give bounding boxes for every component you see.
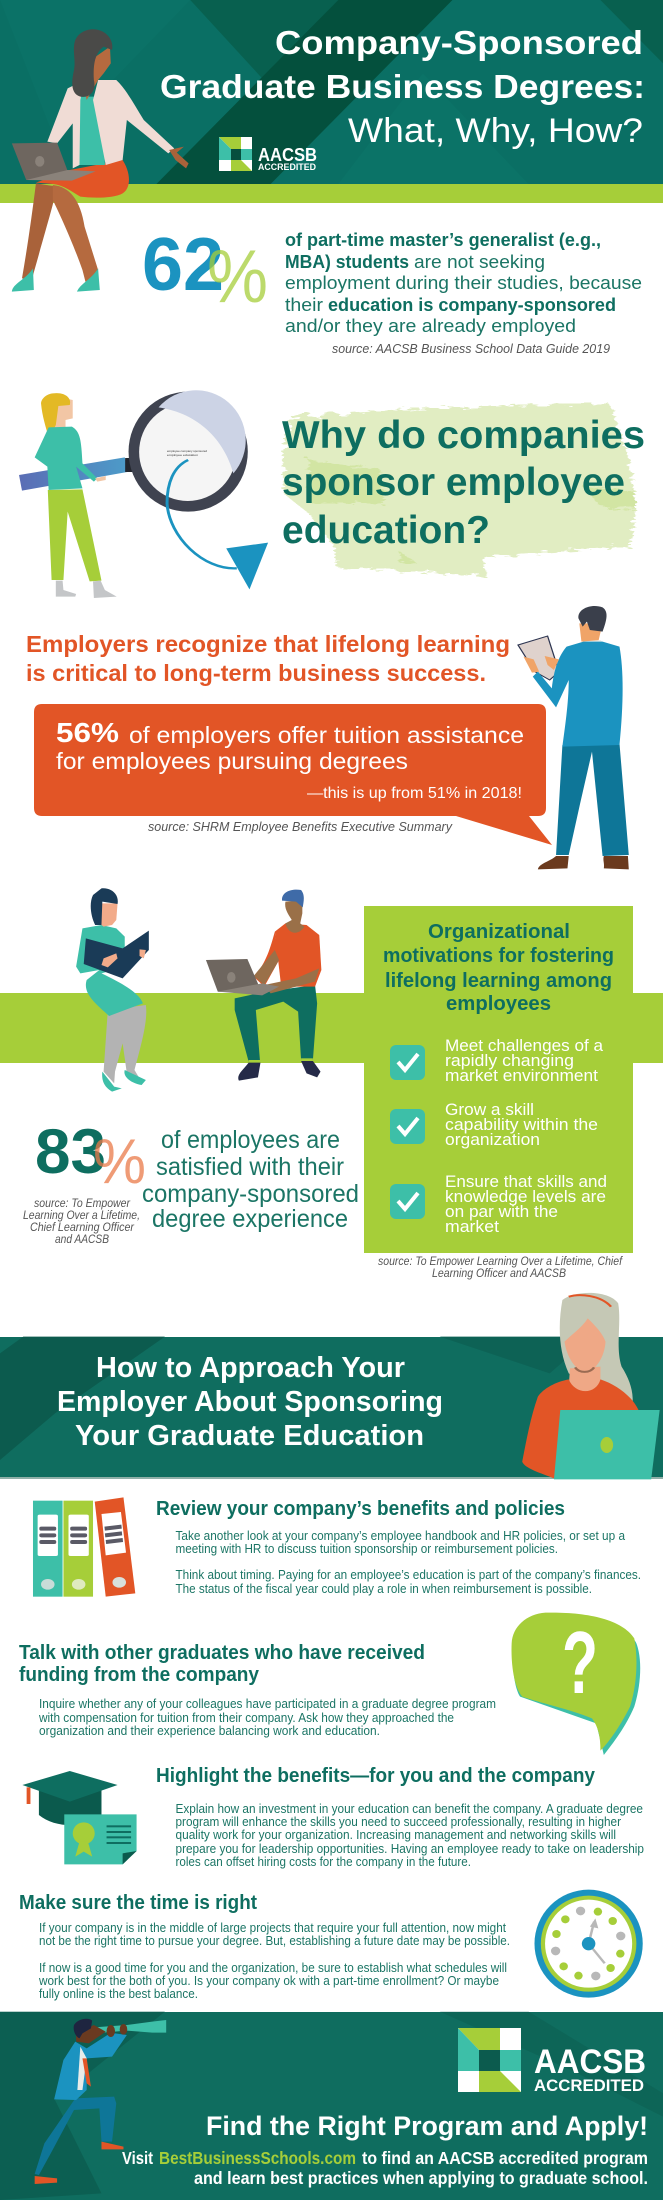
section: review your benefits: Take another look at your company’s employee handbook and HR policies, or set up a	[176, 1528, 626, 1543]
panel heading	[383, 920, 614, 1015]
source: data guide: source: AACSB Business School Data Guide 2019	[332, 342, 610, 356]
heading: why do companies: Why do companies	[282, 414, 645, 457]
list item 1: market environment	[445, 1067, 598, 1085]
section: highlight the benefits	[156, 1765, 644, 1869]
text: 62 percent description: their	[285, 294, 323, 315]
icon: question speech bubble: ?	[562, 1613, 598, 1712]
title: Company-Sponsored	[275, 24, 643, 61]
heading: employers recognize: is critical to long-term business success.	[26, 660, 486, 686]
illustration: man with telescope	[35, 2019, 166, 2184]
section: make sure the time is right: If now is a good time for you and the organization, be sure to establish what schedules will	[39, 1960, 507, 1975]
magnifier tiny text	[167, 449, 207, 457]
stat: 83 percent: 83	[35, 1117, 106, 1187]
magnifier tiny text: employee company sponsored	[167, 449, 207, 453]
illustration: woman with laptop	[12, 29, 189, 292]
icon: check 3	[390, 1184, 425, 1219]
icon: binders	[33, 1497, 135, 1597]
text: 62 percent description: are not seeking	[414, 251, 545, 272]
list item 1: rapidly changing	[445, 1052, 574, 1070]
text: call to action: BestBusinessSchools.com	[159, 2148, 356, 2168]
section: talk with other graduates: Talk with other graduates who have received	[19, 1642, 425, 1664]
section: make sure the time is right: If your company is in the middle of large projects that require your full attention, now might	[39, 1920, 506, 1935]
brush texture behind heading	[283, 403, 636, 577]
header banner	[0, 0, 663, 184]
list item 3	[445, 1173, 607, 1236]
text: 83 percent description	[142, 1126, 359, 1233]
panel: organizational motivations	[364, 906, 633, 1253]
section: talk with other graduates: funding from the company	[19, 1664, 260, 1686]
section: talk with other graduates: Inquire whether any of your colleagues have participated in a graduate degree program	[39, 1696, 496, 1711]
section: make sure the time is right: not be the right time to pursue your degree. But, establishing a future date may be possible.	[39, 1933, 510, 1948]
section: highlight the benefits: Highlight the benefits—for you and the company	[156, 1765, 596, 1787]
list item 2	[445, 1101, 598, 1149]
stat: 62 percent: %	[207, 234, 268, 318]
list item 3: on par with the	[445, 1203, 558, 1221]
text: 83 percent description: satisfied with their	[156, 1153, 344, 1181]
icon: graduation cap and certificate	[22, 1771, 137, 1864]
stat: 62 percent	[142, 222, 268, 318]
illustration: woman with teal laptop	[522, 1293, 660, 1479]
text: call to action: Visit	[122, 2148, 153, 2168]
text: 83 percent description: of employees are	[161, 1126, 340, 1154]
section: review your benefits: meeting with HR to discuss tuition sponsorship or reimbursement policies.	[176, 1541, 558, 1556]
text: 62 percent description: education is company-sponsored	[328, 294, 616, 315]
list item 3: market	[445, 1218, 499, 1236]
source: panel	[378, 1256, 624, 1280]
section: review your benefits	[156, 1498, 641, 1596]
logo: AACSB accredited: ACCREDITED	[258, 162, 316, 172]
title: What, Why, How?	[348, 112, 643, 150]
icon: check 2	[390, 1109, 425, 1144]
section: make sure the time is right: Make sure the time is right	[19, 1892, 257, 1914]
heading: employers recognize	[26, 631, 510, 686]
source: 83 percent: Learning Over a Lifetime,	[23, 1210, 140, 1222]
section: talk with other graduates: with compensation for tuition from their company. Ask how they approached the	[38, 1710, 454, 1725]
section: highlight the benefits: program will enhance the skills you need to succeed professionally, resulting in higher	[176, 1814, 622, 1829]
list item 1: Meet challenges of a	[445, 1037, 604, 1055]
section: review your benefits: The status of the fiscal year could play a role in when reimbursement is possible.	[176, 1581, 592, 1596]
list item 2: capability within the	[445, 1116, 598, 1134]
source: 83 percent: Chief Learning Officer	[30, 1222, 135, 1234]
list item 2: organization	[445, 1131, 540, 1149]
heading: how to approach: Your Graduate Education	[75, 1420, 424, 1452]
heading: how to approach: How to Approach Your	[96, 1352, 405, 1384]
illustration: man with laptop	[206, 890, 321, 1081]
section: make sure the time is right: fully online is the best balance.	[39, 1986, 198, 2001]
source: panel: source: To Empower Learning Over a Lifetime, Chief	[378, 1256, 624, 1268]
section: talk with other graduates: organization and their experience balancing work and education.	[39, 1723, 380, 1738]
panel heading: employees	[446, 992, 551, 1015]
illustration: woman with magnifying glass	[19, 390, 268, 598]
banner: how to approach	[0, 1337, 663, 1479]
list item 2: Grow a skill	[445, 1101, 534, 1119]
list item 3: knowledge levels are	[445, 1188, 606, 1206]
panel heading: motivations for fostering	[383, 944, 614, 967]
title	[160, 24, 645, 150]
source: 83 percent: source: To Empower	[34, 1198, 131, 1210]
text: 83 percent description: degree experience	[152, 1205, 348, 1233]
logo: AACSB accredited: AACSB	[258, 145, 317, 165]
text: call to action	[122, 2148, 648, 2188]
text: 62 percent description: employment during their studies, because	[285, 272, 642, 293]
heading: why do companies: education?	[282, 509, 490, 552]
illustration: man with clipboard	[518, 606, 629, 869]
callout: 56 percent of employers	[34, 704, 552, 845]
icon: question speech bubble	[512, 1613, 640, 1755]
stat: 83 percent: %	[93, 1127, 146, 1197]
source: SHRM: source: SHRM Employee Benefits Executive Summary	[148, 820, 453, 834]
callout: 56 percent of employers: of employers offer tuition assistance	[129, 722, 524, 748]
logo: AACSB accredited large: ACCREDITED	[534, 2076, 644, 2095]
stat: 62 percent: 62	[142, 222, 224, 306]
text: 62 percent description: of part-time master’s generalist (e.g.,	[285, 229, 601, 250]
stat: 83 percent	[35, 1117, 146, 1197]
icon: clock	[534, 1890, 643, 1998]
heading: employers recognize: Employers recognize that lifelong learning	[26, 631, 510, 657]
callout: 56 percent of employers: for employees pursuing degrees	[56, 748, 408, 774]
logo: AACSB accredited	[219, 137, 317, 172]
illustration: woman reading	[76, 888, 149, 1092]
section: make sure the time is right	[19, 1892, 510, 2001]
heading: why do companies	[282, 414, 645, 552]
source: panel: Learning Officer and AACSB	[432, 1268, 566, 1280]
section: highlight the benefits: roles can offset hiring costs for the company in the future.	[176, 1854, 471, 1869]
heading: how to approach	[57, 1352, 443, 1452]
section: talk with other graduates	[19, 1642, 496, 1738]
source: 83 percent: and AACSB	[55, 1234, 109, 1246]
panel heading: Organizational	[428, 920, 570, 943]
footer banner	[0, 2012, 663, 2200]
text: 83 percent description: company-sponsored	[142, 1180, 359, 1208]
band: green stripe	[0, 993, 663, 1063]
callout: 56 percent of employers: 56%	[56, 717, 119, 748]
magnifier tiny text: employee education	[167, 453, 198, 457]
section: highlight the benefits: quality work for your organization. Increasing management and networking skills will	[176, 1827, 616, 1842]
text: 62 percent description	[285, 229, 642, 336]
panel heading: lifelong learning among	[385, 969, 612, 992]
heading: find the right program: Find the Right Program and Apply!	[206, 2111, 648, 2141]
heading: why do companies: sponsor employee	[282, 461, 625, 504]
text: 62 percent description: and/or they are already employed	[285, 315, 576, 336]
logo: AACSB accredited large	[458, 2028, 646, 2095]
green band	[0, 184, 663, 203]
title: Graduate Business Degrees:	[160, 68, 645, 105]
source: 83 percent	[23, 1198, 140, 1246]
icon: check 1	[390, 1045, 425, 1080]
section: make sure the time is right: work best for the both of you. Is your company ok with a part-time enrollment? Or maybe	[38, 1973, 499, 1988]
text: 62 percent description: MBA) students	[285, 251, 409, 272]
section: review your benefits: Review your company’s benefits and policies	[156, 1498, 565, 1520]
heading: how to approach: Employer About Sponsoring	[57, 1386, 443, 1418]
logo: AACSB accredited large: AACSB	[534, 2043, 646, 2081]
list item 3: Ensure that skills and	[445, 1173, 607, 1191]
list item 1	[445, 1037, 604, 1085]
callout: 56 percent of employers: —this is up from 51% in 2018!	[307, 785, 522, 802]
